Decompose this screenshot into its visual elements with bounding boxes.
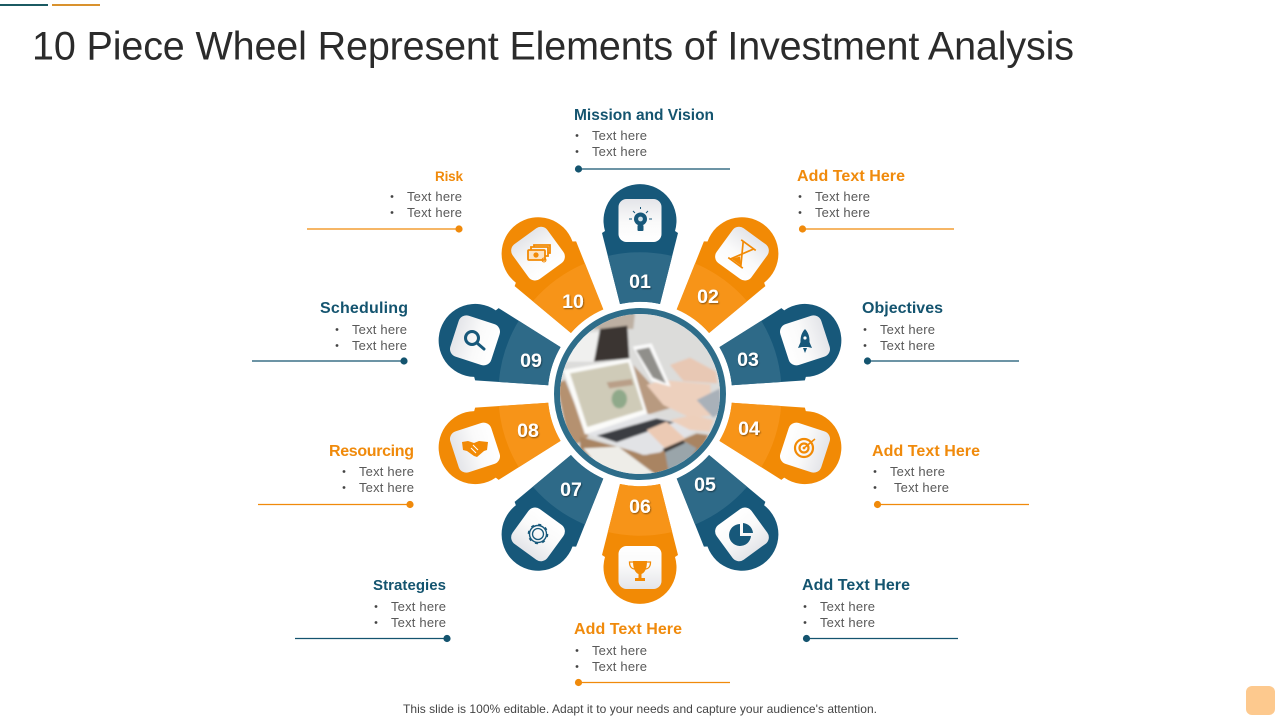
leader line (258, 501, 414, 508)
bullet list (336, 322, 407, 353)
bullet list: Text here (359, 464, 414, 479)
icon: money (528, 245, 550, 262)
leader line (252, 357, 408, 365)
icon: handshake (462, 441, 488, 457)
bullet list: Text here (592, 144, 647, 159)
heading: Risk (435, 169, 463, 184)
label: Add Text Here right (872, 443, 1029, 508)
bullet list: Text here (592, 643, 647, 658)
bullet list: Text here (407, 189, 462, 204)
petal 06 shape (602, 484, 678, 604)
label: Add Text Here top right (797, 168, 954, 233)
petal 05 shape (662, 444, 794, 586)
icon: gear (528, 524, 548, 544)
icon: target (795, 439, 815, 457)
petal 02 (662, 202, 794, 344)
heading: Resourcing (329, 443, 414, 460)
petal 05 (662, 444, 794, 586)
center photo (550, 305, 730, 485)
bullet list: Text here (592, 128, 647, 143)
petal 06 (602, 484, 678, 604)
bullet list (874, 464, 949, 495)
bullet list: Text here (352, 322, 407, 337)
heading: Objectives (862, 300, 943, 317)
icon: light bulb (629, 207, 652, 231)
icon: rocket (798, 329, 812, 353)
number 09: 09 (520, 350, 542, 372)
number 06: 06 (629, 496, 651, 518)
number 05: 05 (694, 474, 716, 496)
heading: Scheduling (320, 300, 408, 317)
petal 09 shape (429, 293, 566, 402)
top accent: teal line (0, 4, 48, 6)
number 01: 01 (629, 271, 651, 293)
bullet list: Text here (820, 599, 875, 614)
petal 10 (486, 202, 618, 344)
number 03: 03 (737, 349, 759, 371)
petal 07 (486, 444, 618, 586)
petal 04 shape (714, 386, 851, 495)
number 02: 02 (697, 286, 719, 308)
footer note: This slide is 100% editable. Adapt it to your needs and capture your audience's attention. (403, 702, 877, 716)
label: Risk (307, 169, 463, 233)
bullet list: Text here (592, 659, 647, 674)
bullet list: Text here (391, 615, 446, 630)
bullet list: Text here (880, 322, 935, 337)
bullet list: Text here (359, 480, 414, 495)
bullet list (799, 189, 870, 220)
title: 10 Piece Wheel Represent Elements of Investment Analysis (32, 24, 1074, 68)
petal 01 shape (602, 184, 678, 304)
number 04: 04 (738, 418, 760, 440)
leader line (575, 165, 730, 173)
leader line (864, 357, 1019, 365)
bullet list (391, 189, 462, 220)
icon: trophy (630, 561, 650, 581)
bullet list: Text here (391, 599, 446, 614)
petal 03 shape (714, 293, 851, 402)
petal 07 shape (486, 444, 618, 586)
corner button (1246, 686, 1275, 715)
heading: Strategies (373, 577, 446, 594)
label: Objectives (862, 300, 1019, 365)
petal 03 (714, 293, 851, 402)
bullet list: Text here (894, 480, 949, 495)
icon: hourglass (728, 240, 756, 268)
label: Strategies (295, 577, 451, 642)
petal 04 (714, 386, 851, 495)
heading: Add Text Here (797, 168, 905, 185)
heading: Add Text Here (802, 577, 910, 594)
bullet list (576, 643, 647, 674)
bullet list (864, 322, 935, 353)
number 07: 07 (560, 479, 582, 501)
label: Add Text Here bottom (574, 621, 730, 686)
bullet list (804, 599, 875, 630)
leader line (799, 225, 954, 233)
icon: magnifier (466, 332, 484, 349)
label: Scheduling (252, 300, 408, 365)
heading: Add Text Here (574, 621, 682, 638)
petal 08 (429, 386, 566, 495)
leader line (295, 635, 451, 642)
petal 10 shape (486, 202, 618, 344)
bullet list: Text here (352, 338, 407, 353)
petal 08 shape (429, 386, 566, 495)
bullet list (343, 464, 414, 495)
number 08: 08 (517, 420, 539, 442)
heading: Mission and Vision (574, 107, 714, 124)
bullet list (375, 599, 446, 630)
bullet list: Text here (890, 464, 945, 479)
bullet list: Text here (815, 205, 870, 220)
petal 09 (429, 293, 566, 402)
heading: Add Text Here (872, 443, 980, 460)
bullet list: Text here (815, 189, 870, 204)
bullet list (576, 128, 647, 159)
icon: pie chart (729, 523, 753, 546)
leader line (874, 501, 1029, 508)
leader line (307, 225, 463, 233)
petal 02 shape (662, 202, 794, 344)
label: Mission and Vision (574, 107, 730, 173)
label: Resourcing (258, 443, 414, 508)
leader line (575, 679, 730, 686)
label: Add Text Here bottom right (802, 577, 958, 642)
bullet list: Text here (407, 205, 462, 220)
number 10: 10 (562, 291, 584, 313)
top accent: orange line (52, 4, 100, 6)
bullet list: Text here (880, 338, 935, 353)
bullet list: Text here (820, 615, 875, 630)
petal 01 (602, 184, 678, 304)
leader line (803, 635, 958, 642)
